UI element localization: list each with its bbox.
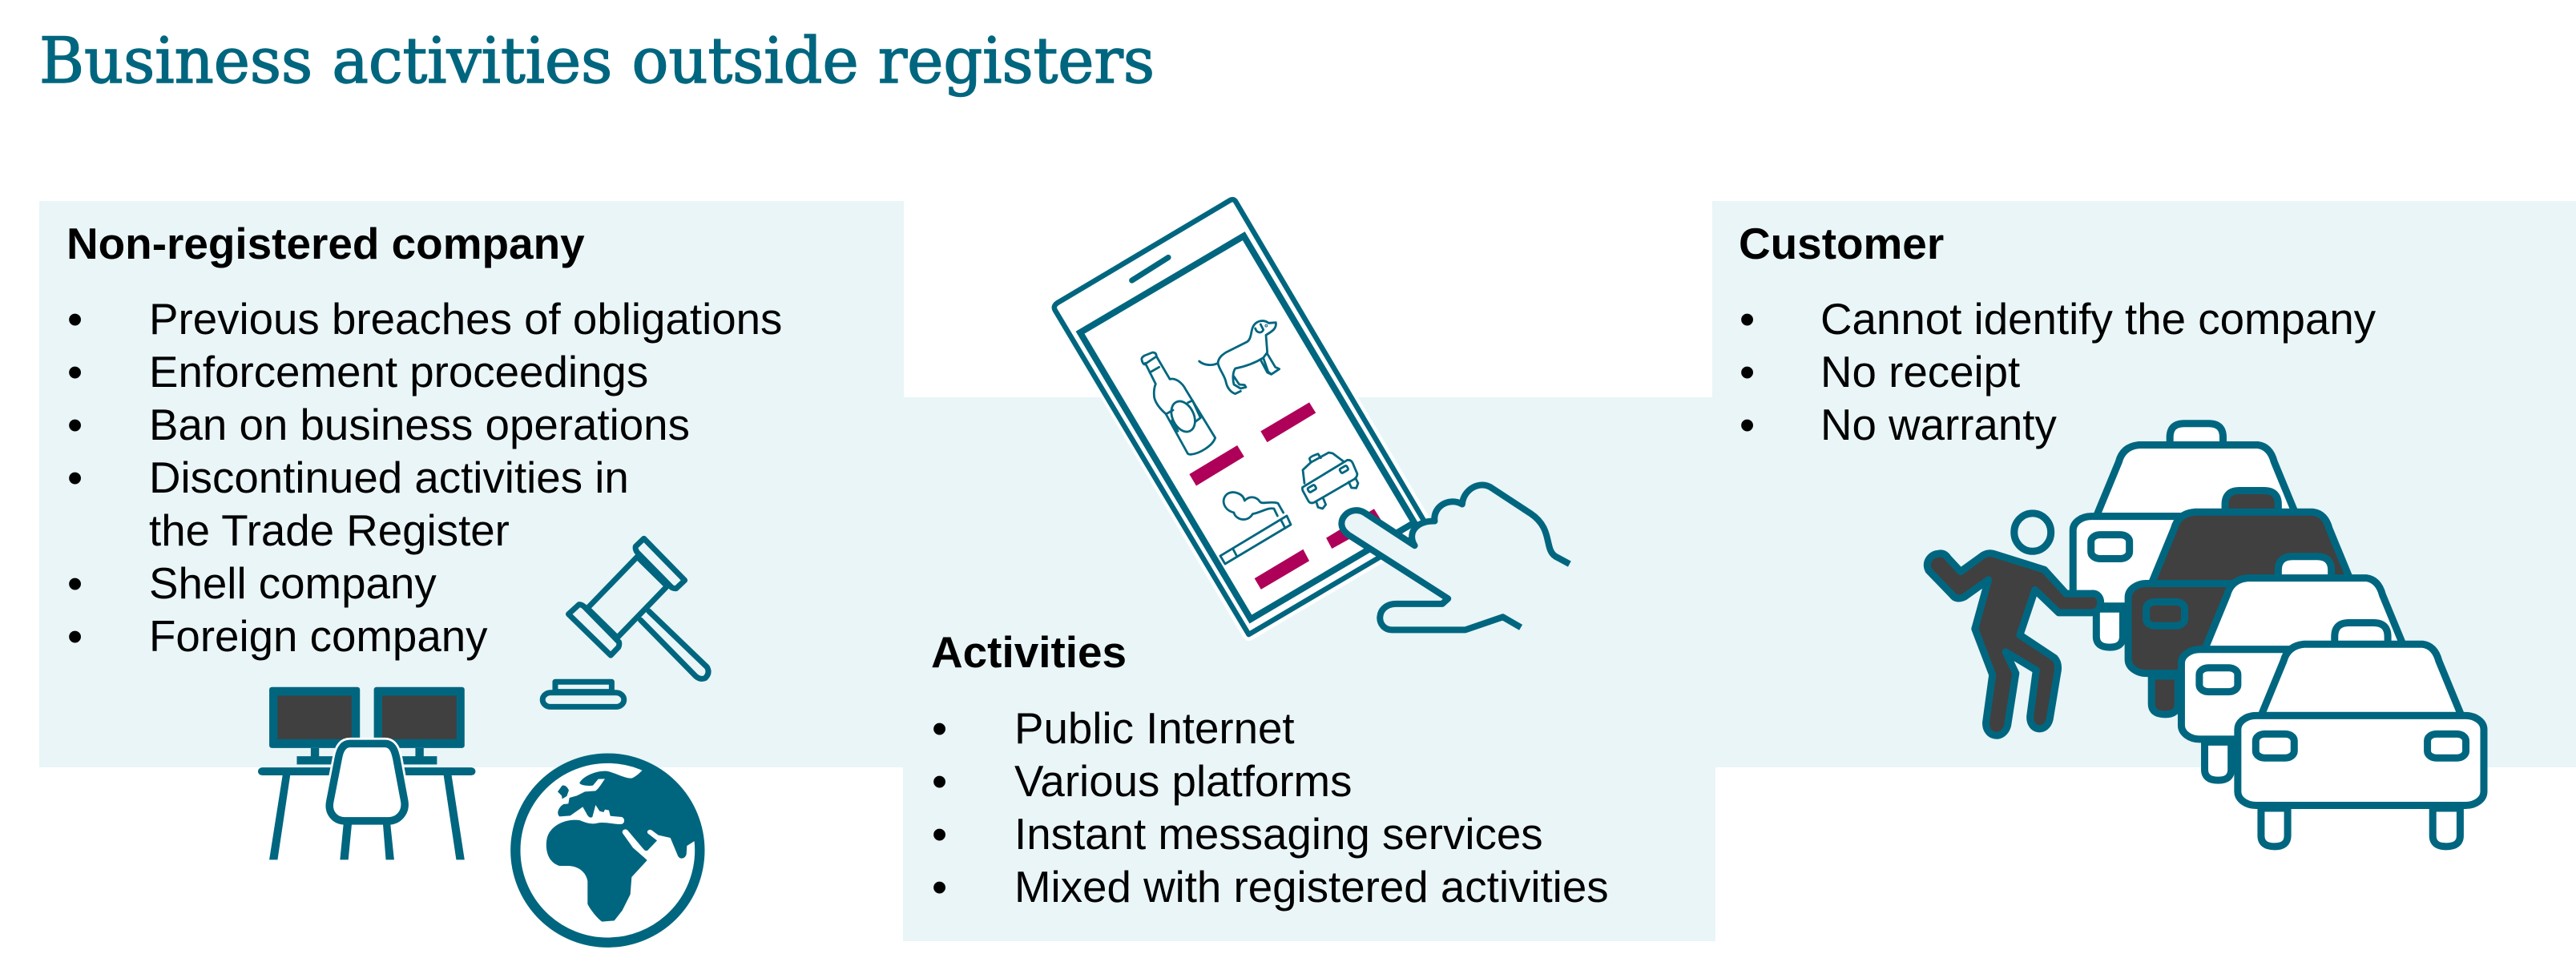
bullet list: company traits: Foreign company bbox=[149, 611, 488, 661]
bullet list: activities: Various platforms bbox=[1014, 756, 1352, 806]
bullet list: company traits: • bbox=[67, 347, 83, 396]
bullet list: company traits: Previous breaches of obligations bbox=[149, 294, 782, 344]
bullet list: customer: • bbox=[1740, 400, 1755, 449]
bullet list: customer: • bbox=[1740, 294, 1755, 344]
text block: activities bbox=[931, 627, 1609, 912]
bullet list: company traits: • bbox=[67, 294, 83, 344]
icon: dog bbox=[1199, 321, 1280, 394]
icon: globe bbox=[515, 759, 699, 943]
panel: activities background bbox=[903, 397, 1715, 941]
bullet list: company traits: Shell company bbox=[149, 558, 437, 608]
chair halo bbox=[329, 743, 405, 821]
icon: row of taxis and man bbox=[1927, 424, 2484, 847]
bullet list: company traits: the Trade Register bbox=[149, 505, 510, 555]
bullet list: activities: Instant messaging services bbox=[1014, 809, 1543, 859]
bullet list: activities: • bbox=[932, 703, 947, 753]
bullet list: customer: • bbox=[1740, 347, 1755, 396]
bullet list: customer: No receipt bbox=[1820, 347, 2020, 396]
text block: customer bbox=[1739, 219, 2376, 449]
continents bbox=[546, 770, 696, 922]
bullet list: company traits: Enforcement proceedings bbox=[149, 347, 648, 396]
bullet list: company traits: • bbox=[67, 453, 83, 502]
bullet list: customer: Cannot identify the company bbox=[1820, 294, 2376, 344]
icon: hand bbox=[1341, 485, 1570, 630]
man bbox=[1927, 513, 2101, 735]
icon: gavel bbox=[542, 538, 708, 706]
bullet list: activities: • bbox=[932, 809, 947, 859]
taxi: middle bbox=[2181, 557, 2428, 780]
taxi: front bbox=[2238, 622, 2484, 847]
heading: non-registered company: Non-registered company bbox=[67, 219, 585, 268]
bullet list: activities: Mixed with registered activities bbox=[1014, 862, 1609, 912]
heading: customer: Customer bbox=[1739, 219, 1944, 268]
panel: non-registered company background bbox=[39, 201, 904, 767]
bullet list: company traits: • bbox=[67, 558, 83, 608]
panel: customer background bbox=[1712, 201, 2576, 767]
bullet list: activities: • bbox=[932, 756, 947, 806]
pictograms bbox=[1142, 321, 1358, 564]
bullet list: company traits: • bbox=[67, 400, 83, 449]
taxi: dark bbox=[2128, 491, 2374, 714]
icon: bottle bbox=[1142, 352, 1215, 454]
globe ring bbox=[515, 759, 699, 943]
bullet list: company traits: Discontinued activities in bbox=[149, 453, 629, 502]
bullet list: customer: No warranty bbox=[1820, 400, 2057, 449]
phone casing and screen bbox=[1054, 199, 1429, 634]
taxi: rear bbox=[2073, 424, 2319, 647]
bullet list: company traits bbox=[67, 294, 782, 661]
icon: smartphone with product pictograms and hand bbox=[1054, 199, 1570, 634]
bullet list: customer bbox=[1740, 294, 2376, 449]
monitor screens bbox=[277, 695, 457, 739]
bullet list: activities: Public Internet bbox=[1014, 703, 1295, 753]
chair bbox=[329, 743, 405, 821]
icon: cigarette and smoke bbox=[1220, 493, 1291, 564]
title: Business activities outside registers bbox=[39, 24, 1155, 98]
bullet list: company traits: • bbox=[67, 611, 83, 661]
bullet list: company traits: Ban on business operations bbox=[149, 400, 690, 449]
chair legs bbox=[340, 819, 394, 859]
bullet list: activities: • bbox=[932, 862, 947, 912]
bullet list: activities bbox=[932, 703, 1609, 912]
heading: activities: Activities bbox=[931, 627, 1127, 677]
icon: taxi bbox=[1302, 453, 1358, 509]
monitors and desk bbox=[258, 687, 475, 859]
icon: desk with monitors and chair bbox=[258, 687, 475, 859]
text block: non-registered company bbox=[67, 219, 782, 661]
